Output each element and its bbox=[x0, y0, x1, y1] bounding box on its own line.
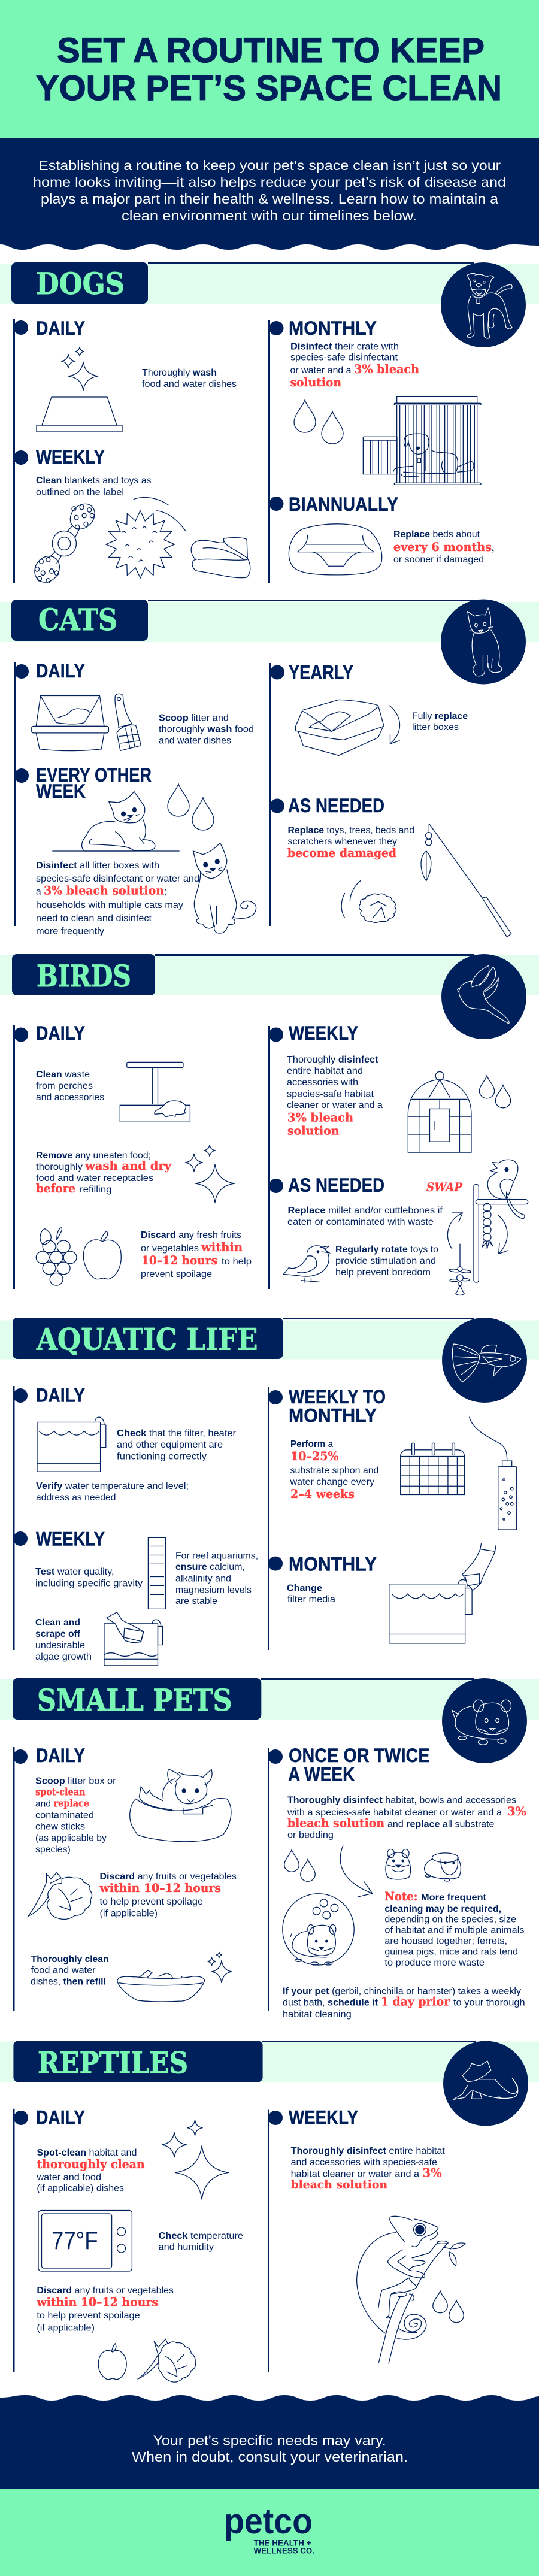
icon: sitting cat bbox=[193, 843, 256, 933]
icon: gravel siphon bbox=[470, 1417, 517, 1530]
icon: water drops bbox=[284, 1850, 315, 1881]
footer note: When in doubt, consult your veterinarian. bbox=[132, 2449, 408, 2465]
aquatic: weekly: magnesium levels bbox=[175, 1585, 252, 1596]
cats: as needed bbox=[270, 795, 511, 937]
small pets: daily: to help prevent spoilage bbox=[99, 1897, 203, 1907]
birds: daily: or vegetables bbox=[141, 1243, 199, 1254]
cats: daily: Scoop litter and bbox=[159, 713, 229, 724]
aquatic: weekly: Clean and bbox=[35, 1618, 80, 1628]
reptiles: daily: water and food bbox=[36, 2172, 101, 2183]
reptiles: daily: thoroughly clean bbox=[37, 2157, 145, 2171]
birds: daily: Clean waste bbox=[36, 1070, 90, 1080]
small pets: once or twice a week: of habitat and if multiple animals bbox=[384, 1925, 525, 1936]
icon: water drops bbox=[294, 400, 343, 444]
small pets: once or twice a week: A WEEK bbox=[288, 1763, 355, 1785]
small pets: once or twice a week: Note: bbox=[384, 1889, 417, 1903]
cats: every other week: households with multiple cats may bbox=[36, 900, 183, 910]
reptiles: daily bbox=[14, 2107, 243, 2382]
section label: birds: BIRDS bbox=[37, 958, 131, 994]
small pets: daily: Thoroughly clean bbox=[31, 1954, 108, 1964]
aquatic: weekly to monthly: water change every bbox=[289, 1477, 374, 1487]
icon: chameleon on branch bbox=[357, 2216, 465, 2364]
dogs: monthly: species-safe disinfectant bbox=[290, 352, 398, 363]
cats: every other week bbox=[14, 764, 256, 937]
cats: every other week: a bbox=[36, 887, 41, 897]
reptiles: weekly: bleach solution bbox=[291, 2177, 387, 2191]
icon: water drops bbox=[433, 2291, 464, 2323]
title: YOUR PET’S SPACE CLEAN bbox=[36, 69, 502, 108]
birds: weekly: cleaner or water and a bbox=[287, 1100, 383, 1110]
birds: daily: Discard any fresh fruits bbox=[141, 1230, 241, 1240]
icon: dog in crate bbox=[363, 396, 481, 485]
cats: as needed: Replace toys, trees, beds and bbox=[287, 825, 414, 836]
aquatic: weekly: undesirable bbox=[35, 1640, 85, 1651]
reptiles: weekly: habitat cleaner or water and a bbox=[291, 2169, 419, 2180]
cats: daily: thoroughly wash food bbox=[159, 725, 254, 735]
small pets: once or twice a week: More frequent bbox=[421, 1893, 486, 1903]
reptiles: daily: Check temperature bbox=[159, 2231, 243, 2241]
icon: lizard badge bbox=[443, 2041, 528, 2126]
dogs: biannually bbox=[270, 494, 494, 575]
panel: birds bbox=[0, 954, 539, 1295]
dogs: weekly bbox=[14, 446, 250, 588]
small pets: once or twice a week: to your thorough bbox=[453, 1998, 525, 2008]
panel: cats bbox=[0, 599, 539, 937]
icon: dog toys and blanket bbox=[30, 498, 250, 588]
aquatic: weekly: ensure calcium, bbox=[175, 1562, 245, 1572]
birds: as needed bbox=[269, 1160, 528, 1295]
icon: hamster badge bbox=[442, 1678, 527, 1763]
small pets: daily: DAILY bbox=[36, 1745, 85, 1766]
panel: aquatic life bbox=[0, 1318, 539, 1666]
reptiles: daily: 77°F bbox=[52, 2226, 98, 2254]
small pets: once or twice a week: Thoroughly disinfect habitat, bowls and accessories bbox=[287, 1796, 516, 1806]
small pets: once or twice a week: habitat cleaning bbox=[283, 2009, 352, 2020]
icon: dog badge bbox=[441, 262, 526, 347]
reptiles: weekly: and accessories with species-safe bbox=[291, 2157, 437, 2168]
icon: sparkles bbox=[162, 2120, 229, 2199]
dogs: biannually: or sooner if damaged bbox=[393, 555, 484, 565]
aquatic: weekly: including specific gravity bbox=[35, 1579, 143, 1588]
cats: daily bbox=[14, 660, 254, 751]
birds: as needed: SWAP bbox=[426, 1180, 463, 1194]
aquatic: weekly: WEEKLY bbox=[36, 1528, 105, 1549]
icon: scraping algae in tank bbox=[104, 1612, 163, 1666]
small pets: daily: food and water bbox=[31, 1966, 96, 1976]
cats: every other week: WEEK bbox=[36, 780, 86, 802]
aquatic: weekly to monthly: 2–4 weeks bbox=[290, 1487, 355, 1501]
dogs: daily bbox=[14, 317, 237, 432]
dogs: daily: DAILY bbox=[36, 317, 85, 339]
footer note: Your pet's specific needs may vary. bbox=[153, 2433, 386, 2448]
reptiles: daily: to help prevent spoilage bbox=[37, 2311, 140, 2321]
dogs: biannually: every 6 months bbox=[393, 540, 492, 554]
birds: as needed: provide stimulation and bbox=[335, 1256, 436, 1266]
small pets: daily: contaminated bbox=[35, 1811, 94, 1821]
aquatic: weekly to monthly: MONTHLY bbox=[289, 1405, 377, 1427]
aquatic: weekly to monthly bbox=[268, 1386, 517, 1530]
birds: weekly: solution bbox=[287, 1124, 340, 1138]
birds: as needed: Replace millet and/or cuttlebones if bbox=[287, 1206, 443, 1216]
small pets: daily: within 10–12 hours bbox=[99, 1881, 221, 1895]
icon: fish badge bbox=[442, 1318, 527, 1403]
small pets: once or twice a week: depending on the species, size bbox=[384, 1915, 516, 1925]
aquatic: monthly: filter media bbox=[287, 1594, 335, 1605]
cats: as needed: become damaged bbox=[287, 846, 396, 860]
reptiles: weekly bbox=[268, 2107, 465, 2364]
aquatic: daily: functioning correctly bbox=[117, 1452, 207, 1461]
intro text: home looks inviting—it also helps reduce your pet’s risk of disease and bbox=[33, 174, 506, 190]
aquatic: weekly to monthly: substrate siphon and bbox=[290, 1466, 378, 1476]
icon: sparkles bbox=[208, 1952, 232, 1983]
icon: hamster, guinea pig, ball and arrow bbox=[283, 1845, 461, 1965]
icon: grapes and apple bbox=[36, 1228, 121, 1285]
small pets: daily: species) bbox=[35, 1845, 71, 1855]
small pets: daily: Scoop litter box or bbox=[35, 1776, 116, 1787]
small pets: once or twice a week: guinea pigs, mice and rats tend bbox=[384, 1947, 518, 1957]
aquatic: weekly: scrape off bbox=[35, 1629, 81, 1639]
dogs: biannually: BIANNUALLY bbox=[289, 494, 398, 515]
small pets: once or twice a week: cleaning may be required, bbox=[384, 1904, 501, 1914]
small pets: daily: dishes, then refill bbox=[31, 1977, 106, 1987]
birds: as needed: help prevent boredom bbox=[335, 1267, 431, 1278]
icon: water drops bbox=[168, 784, 214, 830]
icon: toy swap with parrot on perch bbox=[447, 1160, 528, 1295]
section label: cats: CATS bbox=[38, 602, 117, 637]
small pets: daily: and bbox=[35, 1799, 51, 1809]
small pets: daily: (as applicable by bbox=[35, 1833, 107, 1844]
small pets: daily: Discard any fruits or vegetables bbox=[99, 1872, 237, 1882]
birds: weekly: entire habitat and bbox=[287, 1066, 363, 1076]
footer note bbox=[132, 2433, 408, 2465]
birds: daily: Remove any uneaten food; bbox=[36, 1151, 151, 1161]
birds: daily: DAILY bbox=[36, 1022, 85, 1044]
dogs: monthly: solution bbox=[290, 375, 341, 389]
section label: reptiles: REPTILES bbox=[38, 2045, 188, 2080]
dogs: monthly: Disinfect their crate with bbox=[290, 341, 399, 352]
aquatic: monthly: Change bbox=[287, 1584, 322, 1593]
icon: litter box replacement bbox=[296, 700, 400, 755]
reptiles: daily: and humidity bbox=[159, 2242, 214, 2253]
cats: every other week: ; bbox=[164, 887, 166, 897]
small pets: once or twice a week: bleach solution bbox=[287, 1816, 384, 1830]
dogs: monthly: MONTHLY bbox=[289, 317, 377, 339]
icon: test strip gauge bbox=[148, 1537, 166, 1609]
small pets: once or twice a week: with a species-safe habitat cleaner or water and a bbox=[287, 1808, 502, 1818]
icon: bird badge bbox=[441, 954, 526, 1039]
aquatic: daily bbox=[13, 1385, 236, 1503]
logo: petco: THE HEALTH + bbox=[254, 2538, 311, 2548]
small pets: once or twice a week: or bedding bbox=[287, 1830, 334, 1841]
small pets: daily: spot-clean bbox=[35, 1786, 85, 1798]
birds: daily: thoroughly bbox=[36, 1162, 83, 1172]
cats: every other week: more frequently bbox=[36, 926, 104, 937]
dogs: monthly: 3% bleach bbox=[354, 362, 419, 376]
birds: daily: wash and dry bbox=[84, 1158, 172, 1173]
cats: every other week: need to clean and disinfect bbox=[36, 913, 152, 924]
birds: as needed: AS NEEDED bbox=[288, 1175, 384, 1196]
icon: perch bbox=[120, 1062, 190, 1122]
logo: petco: WELLNESS CO. bbox=[254, 2546, 314, 2555]
small pets: once or twice a week: 1 day prior bbox=[381, 1994, 450, 2009]
aquatic: weekly to monthly: 10–25% bbox=[290, 1449, 339, 1463]
aquatic: weekly: alkalinity and bbox=[175, 1574, 231, 1584]
small pets: once or twice a week bbox=[268, 1745, 526, 2020]
aquatic: daily: Check that the filter, heater bbox=[117, 1428, 236, 1439]
reptiles: daily: (if applicable) dishes bbox=[37, 2184, 124, 2194]
cats: yearly: Fully replace bbox=[412, 712, 468, 721]
intro text: plays a major part in their health & wellness. Learn how to maintain a bbox=[41, 191, 498, 207]
icon: aquarium with filter bbox=[37, 1417, 106, 1472]
icon: sparkles bbox=[185, 1145, 235, 1203]
cats: daily: DAILY bbox=[36, 660, 85, 682]
birds: weekly: accessories with bbox=[287, 1077, 358, 1088]
small pets: once or twice a week: and replace all substrate bbox=[387, 1820, 495, 1830]
logo: petco: petco bbox=[224, 2501, 313, 2541]
birds: daily: refilling bbox=[80, 1185, 112, 1195]
birds: as needed: Regularly rotate toys to bbox=[335, 1245, 438, 1255]
title bbox=[36, 31, 502, 108]
section label: reptiles bbox=[13, 2041, 263, 2082]
cats: as needed: AS NEEDED bbox=[288, 795, 384, 816]
aquatic: daily: Verify water temperature and level; bbox=[36, 1481, 189, 1491]
icon: chinchilla on bed bbox=[130, 1769, 231, 1842]
dogs: monthly: or water and a bbox=[290, 365, 352, 376]
intro text: clean environment with our timelines below. bbox=[122, 208, 417, 223]
section label: dogs: DOGS bbox=[36, 266, 125, 301]
small pets: once or twice a week: If your pet (gerbil, chinchilla or hamster) takes a weekly bbox=[283, 1987, 521, 1997]
icon: small bird bbox=[284, 1246, 329, 1283]
aquatic: daily: address as needed bbox=[36, 1493, 116, 1503]
title: SET A ROUTINE TO KEEP bbox=[57, 31, 485, 70]
cats: as needed: scratchers whenever they bbox=[287, 837, 397, 847]
aquatic: weekly bbox=[13, 1528, 258, 1666]
dogs: monthly bbox=[270, 317, 481, 485]
header panel bbox=[0, 0, 539, 139]
intro panel bbox=[0, 138, 539, 250]
birds: daily: food and water receptacles bbox=[36, 1173, 153, 1183]
icon: calendar bbox=[401, 1443, 464, 1494]
cats: every other week: Disinfect all litter boxes with bbox=[36, 861, 159, 871]
small pets: daily: chew sticks bbox=[35, 1822, 85, 1832]
icon: feather wand and toy ball bbox=[341, 824, 511, 937]
cats: every other week: species-safe disinfectant or water and bbox=[36, 874, 199, 884]
birds: daily: from perches bbox=[36, 1081, 93, 1091]
small pets: daily: replace bbox=[54, 1797, 89, 1809]
cats: daily: and water dishes bbox=[159, 735, 231, 746]
icon: dog bed bbox=[289, 524, 382, 575]
aquatic: weekly: algae growth bbox=[35, 1652, 92, 1662]
aquatic: monthly bbox=[268, 1543, 496, 1643]
aquatic: monthly: MONTHLY bbox=[289, 1554, 377, 1575]
birds: as needed: eaten or contaminated with waste bbox=[287, 1217, 434, 1227]
cats: every other week: EVERY OTHER bbox=[36, 764, 152, 786]
aquatic: weekly: For reef aquariums, bbox=[175, 1551, 258, 1561]
icon: apple, carrot and cabbage bbox=[98, 2339, 195, 2382]
reptiles: weekly: WEEKLY bbox=[289, 2107, 358, 2129]
small pets: once or twice a week: dust bath, schedule it bbox=[283, 1998, 378, 2008]
icon: cat badge bbox=[441, 599, 526, 684]
cats: yearly: litter boxes bbox=[412, 722, 459, 732]
birds: weekly: WEEKLY bbox=[289, 1022, 358, 1044]
birds: daily bbox=[14, 1022, 252, 1285]
aquatic: daily: and other equipment are bbox=[117, 1440, 223, 1450]
icon: thermostat 77°F bbox=[38, 2210, 132, 2271]
birds: daily: before bbox=[36, 1181, 75, 1195]
birds: weekly bbox=[269, 1022, 511, 1152]
aquatic: daily: DAILY bbox=[36, 1385, 85, 1406]
aquatic: weekly to monthly: WEEKLY TO bbox=[289, 1386, 386, 1407]
section label: small pets: SMALL PETS bbox=[37, 1682, 232, 1718]
reptiles: daily: (if applicable) bbox=[37, 2323, 95, 2333]
aquatic: weekly to monthly: Perform a bbox=[290, 1439, 333, 1449]
birds: weekly: 3% bleach bbox=[287, 1110, 353, 1125]
icon: carrot and cabbage bbox=[28, 1873, 92, 1920]
small pets: daily: (if applicable) bbox=[99, 1909, 158, 1919]
small pets: daily bbox=[13, 1745, 237, 2002]
birds: daily: prevent spoilage bbox=[141, 1269, 212, 1279]
birds: daily: and accessories bbox=[36, 1092, 104, 1103]
icon: litter box and scoop bbox=[32, 694, 141, 751]
section label: birds bbox=[12, 954, 155, 995]
small pets: once or twice a week: 3% bbox=[507, 1804, 526, 1818]
icon: clean bowl bbox=[37, 347, 122, 432]
reptiles: daily: DAILY bbox=[36, 2107, 85, 2129]
icon: water drops bbox=[479, 1076, 511, 1108]
dogs: daily: food and water dishes bbox=[142, 379, 237, 389]
dogs: biannually: , bbox=[492, 543, 494, 553]
intro text: Establishing a routine to keep your pet’s space clean isn’t just so your bbox=[38, 158, 501, 173]
panel: reptiles bbox=[0, 2041, 539, 2382]
reptiles: weekly: Thoroughly disinfect entire habitat bbox=[291, 2146, 446, 2156]
aquatic: weekly: Test water quality, bbox=[35, 1567, 114, 1577]
dogs: daily: Thoroughly wash bbox=[142, 368, 217, 378]
birds: daily: 10–12 hours bbox=[141, 1253, 217, 1267]
section label: aquatic life: AQUATIC LIFE bbox=[36, 1322, 258, 1357]
birds: weekly: Thoroughly disinfect bbox=[287, 1055, 378, 1065]
intro text bbox=[33, 158, 506, 223]
reptiles: weekly: 3% bbox=[423, 2166, 442, 2180]
panel: dogs bbox=[0, 262, 539, 588]
cats: yearly bbox=[270, 661, 468, 755]
cats: every other week: 3% bleach solution bbox=[44, 883, 164, 898]
dogs: weekly: WEEKLY bbox=[36, 446, 105, 468]
aquatic: weekly: are stable bbox=[175, 1596, 217, 1606]
section label: dogs bbox=[11, 262, 148, 304]
dogs: biannually: Replace beds about bbox=[393, 529, 480, 540]
small pets: once or twice a week: to produce more waste bbox=[384, 1958, 485, 1968]
icon: changing filter in tank bbox=[389, 1543, 496, 1643]
small pets: once or twice a week: are housed together; ferrets, bbox=[384, 1936, 507, 1947]
footer panel bbox=[0, 2395, 539, 2576]
reptiles: daily: Spot-clean habitat and bbox=[37, 2148, 137, 2158]
cats: yearly: YEARLY bbox=[289, 661, 353, 683]
dogs: weekly: outlined on the label bbox=[36, 488, 124, 497]
section label: cats bbox=[11, 600, 148, 641]
birds: daily: to help bbox=[222, 1257, 252, 1267]
birds: weekly: species-safe habitat bbox=[287, 1089, 374, 1100]
dogs: weekly: Clean blankets and toys as bbox=[36, 476, 152, 486]
small pets: once or twice a week: ONCE OR TWICE bbox=[289, 1745, 430, 1766]
reptiles: daily: Discard any fruits or vegetables bbox=[37, 2286, 174, 2296]
birds: daily: within bbox=[201, 1240, 243, 1254]
panel: small pets bbox=[0, 1678, 539, 2020]
icon: bowl of food with sparkles bbox=[117, 1970, 205, 2002]
icon: lying cat bbox=[52, 791, 180, 851]
reptiles: daily: within 10–12 hours bbox=[36, 2295, 158, 2309]
icon: birdcage bbox=[408, 1071, 471, 1152]
